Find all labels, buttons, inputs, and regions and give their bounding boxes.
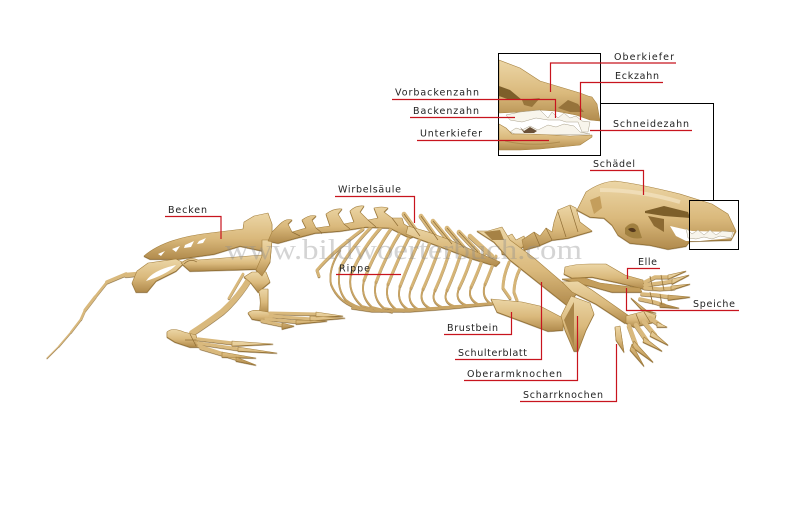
label: Backenzahn: [410, 106, 515, 118]
front arms: [562, 264, 644, 323]
label: Elle: Elle: [638, 257, 657, 268]
zoom inset skull: [499, 54, 600, 155]
neck vertebrae: [500, 205, 592, 256]
ribs: [317, 226, 520, 312]
label: Oberkiefer: Oberkiefer: [614, 52, 674, 63]
humerus: [561, 296, 594, 351]
shoulder blade: [477, 227, 576, 306]
label: Wirbelsäule: [335, 184, 414, 223]
label: Backenzahn: Backenzahn: [413, 106, 479, 117]
label: Vorbackenzahn: Vorbackenzahn: [395, 88, 479, 98]
label: Scharrknochen: Scharrknochen: [523, 390, 603, 401]
lower hand: [615, 311, 668, 366]
label: Schneidezahn: Schneidezahn: [613, 119, 689, 130]
label: Oberarmknochen: Oberarmknochen: [467, 369, 562, 380]
label: Unterkiefer: [417, 128, 549, 140]
label: Eckzahn: [580, 71, 663, 120]
label: Schulterblatt: Schulterblatt: [458, 348, 527, 359]
label: Oberkiefer: [550, 52, 676, 92]
label: Brustbein: [444, 312, 512, 334]
pelvis: [132, 213, 272, 292]
label: Elle: [628, 257, 660, 279]
zoom inset frame: [498, 54, 600, 156]
skull detail box: [690, 200, 738, 250]
connector line: [600, 104, 714, 200]
label: Schädel: [590, 159, 644, 195]
label: Schulterblatt: [455, 282, 542, 360]
label: Becken: [165, 205, 221, 239]
label: Eckzahn: Eckzahn: [615, 71, 659, 82]
label: Rippe: [336, 264, 401, 274]
skeleton: [47, 54, 736, 366]
label: Brustbein: Brustbein: [447, 323, 498, 334]
watermark: www.bildwoerterbuch.com: [225, 234, 582, 266]
tail: [47, 274, 138, 358]
hind legs: [167, 272, 345, 365]
sternum bone: [491, 299, 563, 331]
upper hand: [631, 271, 690, 313]
spine: [268, 206, 500, 266]
label: Vorbackenzahn: [392, 88, 556, 118]
label: Oberarmknochen: [464, 316, 578, 380]
label: Scharrknochen: [520, 344, 616, 402]
label: Rippe: Rippe: [339, 264, 370, 274]
label: Speiche: [626, 288, 739, 310]
label: Becken: Becken: [168, 205, 207, 216]
label: Unterkiefer: Unterkiefer: [420, 128, 482, 140]
label: Speiche: Speiche: [693, 299, 735, 310]
skull: [577, 181, 736, 249]
label: Wirbelsäule: Wirbelsäule: [338, 184, 401, 196]
label: Schädel: Schädel: [593, 159, 635, 170]
